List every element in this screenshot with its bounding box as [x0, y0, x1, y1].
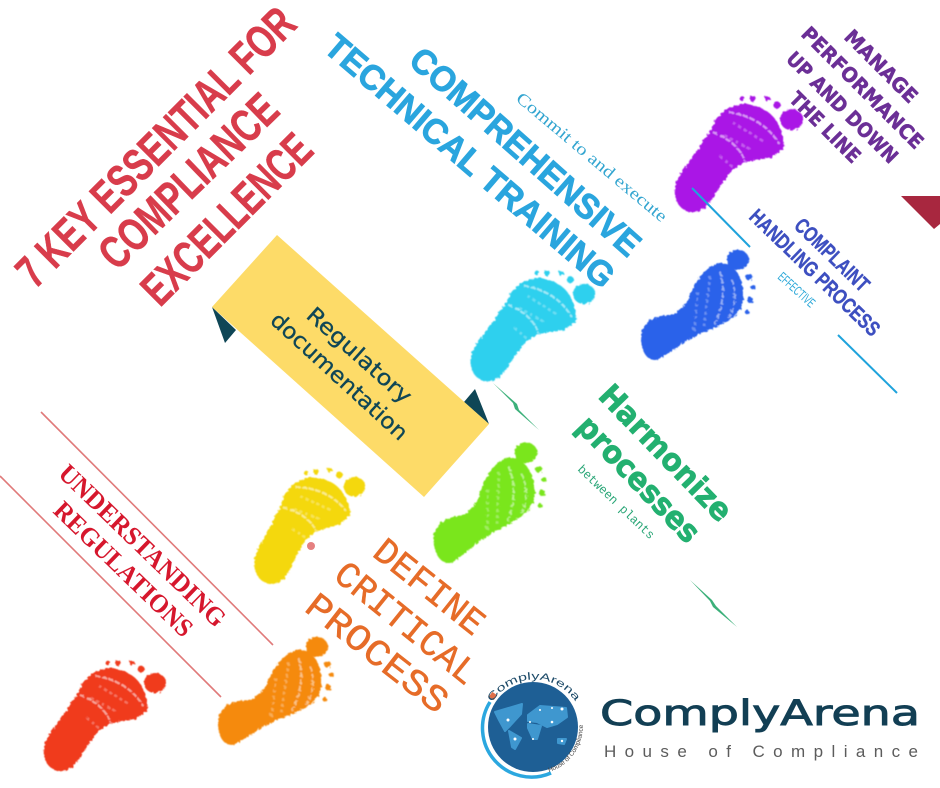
- heading: complaint handling process: HANDLING PROCESS: [745, 205, 884, 341]
- dot: [307, 542, 315, 550]
- map points: [506, 707, 564, 742]
- banner fold left: [212, 307, 236, 343]
- logo tagline: house of compliance: House of Compliance: [604, 742, 918, 761]
- footprint: cyan: [470, 269, 596, 383]
- banner fold right: [464, 389, 489, 424]
- heading: harmonize processes: processes: [569, 409, 707, 550]
- banner: regulatory documentation: [212, 235, 489, 497]
- heading: harmonize processes: Harmonize: [591, 378, 739, 529]
- heading: define critical process: DEFINE: [364, 532, 492, 646]
- emblem accent: [489, 692, 497, 700]
- heading: define critical process: [296, 532, 492, 724]
- line: purple footprint to complaint: [692, 188, 750, 247]
- footprint: yellow: [243, 463, 376, 586]
- banner body: [212, 235, 489, 497]
- emblem name: ComplyArena: [488, 672, 578, 702]
- heading: understanding regulations: UNDERSTANDING: [53, 458, 232, 633]
- title: 7 key essential for compliance excellence: COMPLIANCE: [88, 83, 289, 279]
- text: effective: EFFECTIVE: [775, 269, 819, 310]
- banner text: documentation: [265, 308, 412, 446]
- title: 7 key essential for compliance excellence: EXCELLENCE: [130, 123, 323, 315]
- rule: below understanding: [0, 476, 221, 697]
- zigzag line: lower green: [690, 580, 737, 627]
- heading: complaint handling process: [745, 205, 884, 341]
- heading: manage performance up and down the line: PERFORMANCE: [796, 22, 929, 154]
- zigzag line: upper green: [493, 383, 539, 430]
- heading: manage performance up and down the line: UP AND DOWN: [781, 47, 903, 168]
- rule: above understanding: [41, 412, 273, 645]
- footprint: blue: [641, 250, 755, 360]
- heading: comprehensive technical training: COMPREHENSIVE: [402, 40, 648, 264]
- heading: define critical process: PROCESS: [296, 586, 455, 724]
- emblem outer arc: [483, 702, 551, 777]
- footprint: green: [426, 441, 553, 564]
- footprint: orange: [217, 635, 335, 747]
- emblem disc: [488, 682, 578, 772]
- logo: globe emblem: [480, 672, 583, 779]
- banner text: Regulatory: [301, 303, 416, 409]
- world map: [495, 704, 567, 749]
- heading: define critical process: CRITICAL: [324, 555, 485, 696]
- heading: manage performance up and down the line: THE LINE: [784, 87, 866, 168]
- heading: manage performance up and down the line: MANAGE: [839, 25, 923, 108]
- footprint: red: [44, 660, 166, 771]
- emblem tagline: House of Compliance: [548, 725, 583, 772]
- logo wordmark: complyarena: ComplyArena: [600, 694, 920, 734]
- heading: complaint handling process: COMPLAINT: [790, 214, 874, 297]
- line: under complaint: [838, 335, 897, 393]
- text: between plants: between plants: [574, 463, 657, 543]
- corner triangle: [901, 196, 940, 229]
- heading: understanding regulations: REGULATIONS: [48, 495, 199, 643]
- text: commit to and execute: Commit to and execute: [512, 89, 671, 226]
- footprint: purple: [675, 96, 803, 212]
- heading: comprehensive technical training: TECHNICAL TRAINING: [317, 26, 622, 296]
